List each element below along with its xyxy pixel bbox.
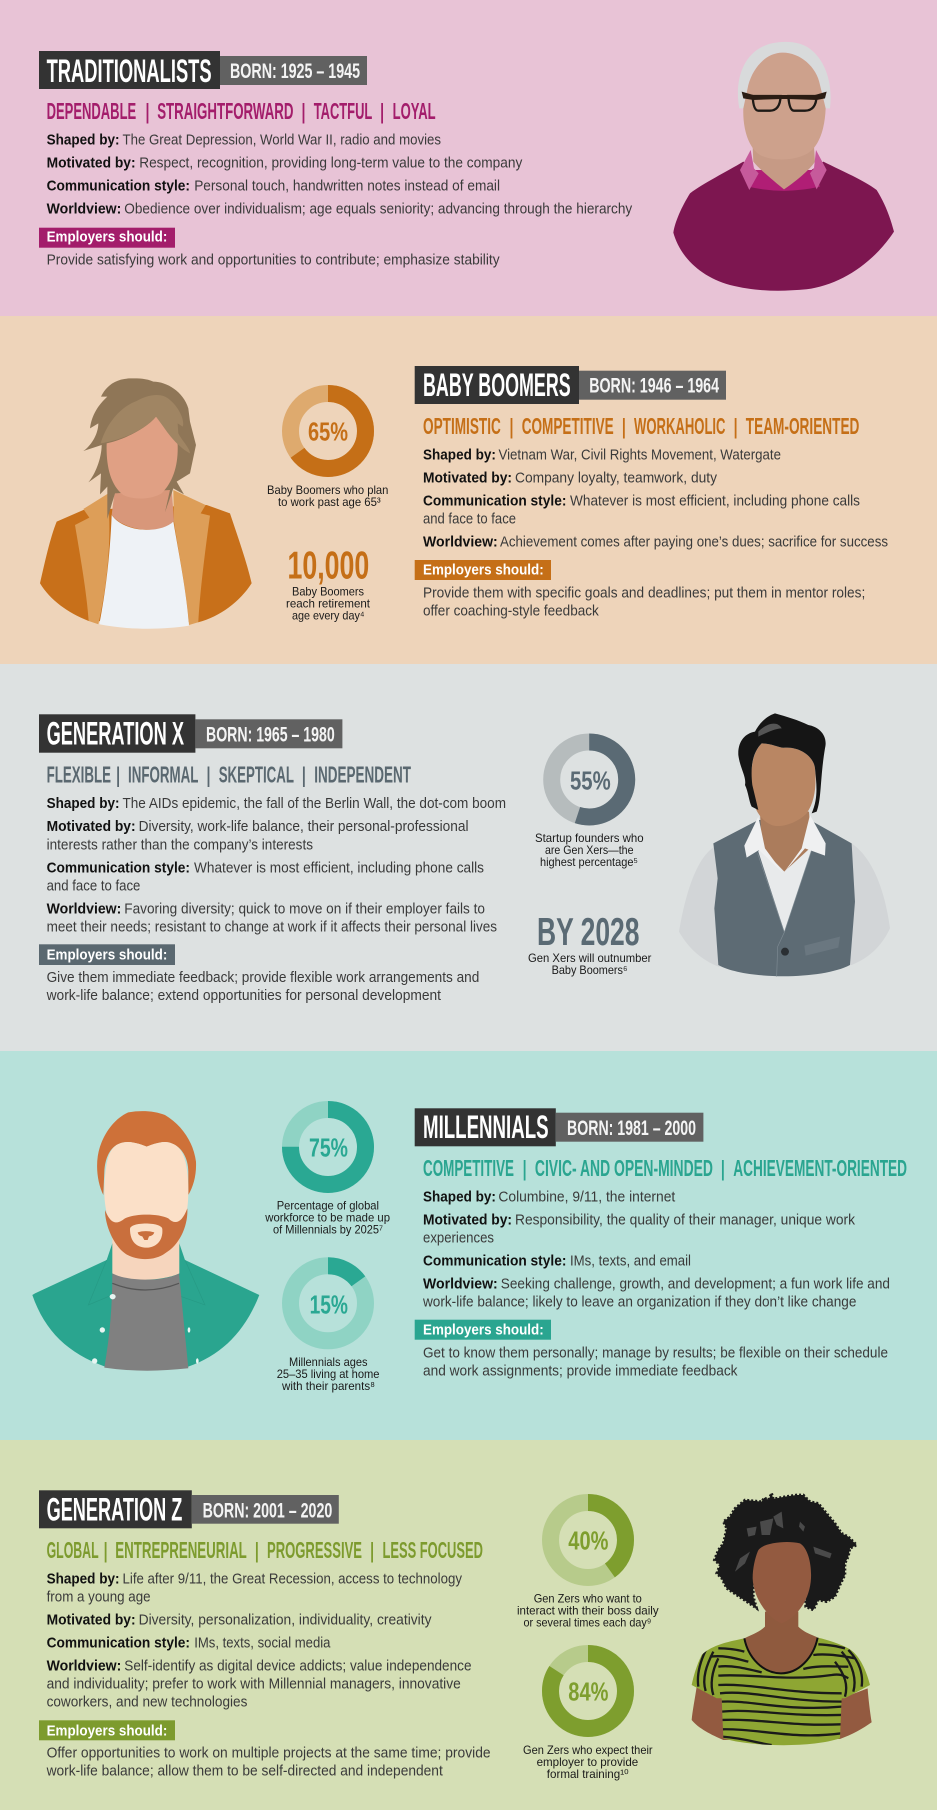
donut chart: 65% [290, 394, 366, 468]
callout: Employers should: Give them immediate feedback; provide flexible work arrangements and [47, 969, 479, 986]
text block: Baby Boomers details: Communication style: [423, 492, 566, 509]
traits: Traditionalists: STRAIGHTFORWARD [157, 98, 294, 124]
heading: Millennials: BORN: 1981 – 2000 [567, 1116, 696, 1140]
heading: Baby Boomers: BABY BOOMERS [423, 367, 571, 403]
text block: Baby Boomers details: Worldview: [423, 533, 498, 550]
donut chart: 75%: 75% [309, 1135, 348, 1163]
traits: Generation Z: | [103, 1538, 109, 1563]
text block: Baby Boomers details: and face to face [423, 510, 516, 527]
callout: Employers should: Provide them with specific goals and deadlines; put them in mentor roles; [423, 585, 865, 602]
callout: Employers should: Employers should: [423, 562, 544, 579]
callout: Employers should: Offer opportunities to work on multiple projects at the same time; provide [47, 1745, 491, 1762]
caption: 75% stat: Percentage of global [277, 1198, 379, 1212]
caption: 40% stat: or several times each day⁹ [524, 1616, 651, 1630]
text block: Generation Z details: Worldview: [47, 1658, 121, 1675]
text block: Generation X details: meet their needs; resistant to change at work if it affects their personal lives [47, 918, 497, 935]
caption: 75% stat: workforce to be made up [264, 1210, 390, 1224]
traits: Traditionalists [47, 98, 436, 124]
caption: 40% stat: Gen Zers who want to [534, 1592, 642, 1606]
text block: Generation X details: Communication style: [47, 859, 190, 876]
text block: Baby Boomers details: Shaped by: [423, 446, 496, 463]
traits: Traditionalists: | [301, 99, 306, 124]
illustration: woman with afro and striped shirt [692, 1493, 872, 1745]
stat: 10,000: Baby Boomers [292, 584, 364, 598]
traits: Baby Boomers: | [733, 414, 738, 439]
text block: Traditionalists details [47, 132, 633, 218]
callout: Employers should: work-life balance; allow them to be self-directed and independent [46, 1763, 444, 1780]
text block: Generation X details: Diversity, work-life balance, their personal-professional [139, 818, 468, 835]
caption: 40% stat: interact with their boss daily [517, 1604, 659, 1618]
traits: Traditionalists: LOYAL [393, 98, 436, 124]
traits: Generation Z: | [369, 1538, 375, 1563]
text block: Millennials details: Motivated by: [423, 1211, 512, 1228]
text block: Generation X details: Motivated by: [47, 818, 136, 835]
text block: Millennials details: Columbine, 9/11, the internet [498, 1188, 676, 1205]
heading: Millennials: MILLENNIALS [423, 1109, 549, 1145]
traits: Generation X: INDEPENDENT [314, 762, 411, 788]
panel: Generation Z [0, 1440, 937, 1810]
text block: Millennials details: Shaped by: [423, 1188, 496, 1205]
traits: Baby Boomers [423, 413, 859, 439]
traits: Millennials: | [522, 1156, 527, 1181]
text block: Baby Boomers details: Motivated by: [423, 469, 512, 486]
text block: Generation Z details: and individuality; prefer to work with Millennial managers, innovative [47, 1676, 461, 1693]
heading: Baby Boomers: BORN: 1946 – 1964 [589, 374, 719, 398]
traits: Baby Boomers: | [509, 414, 514, 439]
callout: Employers should: and work assignments; provide immediate feedback [423, 1362, 738, 1379]
caption: 84% stat [523, 1743, 653, 1781]
text block: Generation Z details: Self-identify as digital device addicts; value independence [124, 1658, 472, 1675]
traits: Baby Boomers: COMPETITIVE [522, 413, 614, 439]
text block: Millennials details: Worldview: [423, 1276, 498, 1293]
callout: Employers should: Provide satisfying work and opportunities to contribute; emphasize stability [47, 251, 500, 268]
callout: Employers should [415, 1320, 888, 1379]
traits: Millennials: | [720, 1156, 726, 1181]
heading: Generation Z: BORN: 2001 – 2020 [203, 1498, 332, 1522]
caption: 65% stat [267, 483, 388, 509]
stat: 10,000: 10,000 [288, 544, 369, 587]
traits: Generation X: | [206, 763, 211, 788]
traits: Millennials: COMPETITIVE [423, 1155, 514, 1181]
text block: Millennials details: Responsibility, the quality of their manager, unique work [515, 1211, 855, 1228]
caption: 15% stat: 25–35 living at home [277, 1367, 380, 1381]
stat: By 2028: Gen Xers will outnumber [528, 951, 651, 965]
stat: By 2028 [528, 911, 651, 977]
text block: Traditionalists details: Worldview: [47, 201, 121, 218]
illustration: man with dark hair and vest [679, 713, 890, 977]
panel: Generation X [0, 664, 937, 1051]
caption: 84% stat: formal training¹⁰ [547, 1767, 629, 1781]
donut chart: 84%: 84% [568, 1679, 608, 1707]
traits: Generation X: | [301, 763, 307, 788]
text block: Millennials details: Communication style: [423, 1253, 566, 1270]
traits: Baby Boomers: OPTIMISTIC [423, 413, 501, 439]
callout: Employers should: offer coaching-style feedback [423, 603, 599, 620]
text block: Millennials details: work-life balance; likely to leave an organization if they don’t like change [422, 1294, 856, 1311]
panel: Millennials [0, 1051, 937, 1440]
traits: Generation X [47, 762, 411, 788]
text block: Traditionalists details: Shaped by: [47, 132, 120, 148]
traits: Generation Z: GLOBAL [47, 1537, 99, 1563]
text block: Generation Z details: Shaped by: [47, 1570, 120, 1587]
caption: 84% stat: employer to provide [537, 1755, 639, 1769]
donut chart: 40% [550, 1502, 626, 1578]
traits: Millennials: CIVIC- AND OPEN-MINDED [535, 1155, 713, 1181]
donut chart: 40%: 40% [568, 1527, 608, 1555]
text block: Traditionalists details: Respect, recognition, providing long-term value to the company [139, 155, 523, 172]
caption: 65% stat: Baby Boomers who plan [267, 483, 388, 497]
text block: Generation Z details: from a young age [47, 1589, 151, 1606]
text block: Generation X details [47, 795, 506, 935]
traits: Baby Boomers: TEAM-ORIENTED [746, 413, 859, 439]
text block: Millennials details: IMs, texts, and email [570, 1253, 691, 1270]
text block: Generation Z details: Communication style: [47, 1635, 190, 1652]
donut chart: 75% [290, 1110, 366, 1184]
text block: Generation Z details: coworkers, and new technologies [47, 1694, 247, 1711]
heading: Traditionalists: TRADITIONALISTS [47, 53, 212, 89]
heading: Traditionalists: BORN: 1925 – 1945 [230, 59, 360, 83]
stat: By 2028: Baby Boomers⁶ [552, 963, 628, 977]
caption: 55% stat [535, 831, 644, 869]
text block: Millennials details: experiences [423, 1229, 494, 1246]
callout: Employers should: Employers should: [47, 229, 167, 246]
illustration: woman with long hair and orange jacket [40, 378, 252, 629]
text block: Generation X details: Whatever is most efficient, including phone calls [194, 859, 484, 876]
stat: 10,000 [286, 544, 371, 622]
callout: Employers should: Get to know them personally; manage by results; be flexible on their schedule [423, 1344, 888, 1361]
heading: Generation X: BORN: 1965 – 1980 [206, 722, 335, 746]
traits: Traditionalists: DEPENDABLE [47, 98, 136, 124]
donut chart: 55% [552, 742, 627, 817]
caption: 40% stat [517, 1592, 659, 1630]
traits: Generation Z: ENTREPRENEURIAL [115, 1537, 247, 1563]
traits: Generation X: FLEXIBLE [47, 762, 111, 788]
caption: 65% stat: to work past age 65³ [278, 495, 381, 509]
caption: 84% stat: Gen Zers who expect their [523, 1743, 653, 1757]
callout: Employers should: Employers should: [423, 1322, 544, 1339]
stat: 10,000: reach retirement [286, 596, 371, 610]
traits: Generation X: INFORMAL [128, 762, 198, 788]
traits: Traditionalists: | [145, 99, 150, 124]
stat: By 2028: BY 2028 [537, 911, 640, 954]
traits: Generation Z: LESS FOCUSED [382, 1537, 483, 1563]
text block: Traditionalists details: Personal touch, handwritten notes instead of email [194, 178, 500, 195]
heading: Generation Z: GENERATION Z [47, 1491, 182, 1527]
text block: Generation X details: Worldview: [47, 900, 121, 917]
text block: Generation X details: Favoring diversity; quick to move on if their employer fails to [124, 900, 485, 917]
donut chart: 65%: 65% [308, 419, 348, 447]
text block: Generation Z details: IMs, texts, social media [194, 1635, 331, 1652]
panel: Baby Boomers [0, 316, 937, 664]
text block: Generation Z details: Life after 9/11, the Great Recession, access to technology [122, 1570, 462, 1587]
text block: Millennials details [422, 1188, 890, 1311]
caption: 75% stat [264, 1198, 390, 1236]
traits: Generation X: SKEPTICAL [219, 762, 294, 788]
heading: Generation X: GENERATION X [47, 716, 184, 752]
caption: 15% stat: Millennials ages [289, 1355, 368, 1369]
text block: Traditionalists details: Motivated by: [47, 155, 136, 172]
caption: 15% stat [277, 1355, 380, 1393]
text block: Baby Boomers details: Company loyalty, teamwork, duty [515, 469, 717, 486]
text block: Traditionalists details: Obedience over individualism; age equals seniority; advancing through the hierarchy [124, 201, 633, 218]
donut chart: 55%: 55% [570, 767, 611, 795]
traits: Baby Boomers: | [621, 414, 627, 439]
callout: Employers should [415, 560, 865, 620]
traits: Baby Boomers: WORKAHOLIC [634, 413, 726, 439]
illustration: bearded man with green shirt [32, 1111, 259, 1371]
text block: Baby Boomers details: Achievement comes after paying one’s dues; sacrifice for success [500, 533, 888, 550]
caption: 55% stat: highest percentage⁵ [540, 855, 638, 869]
caption: 75% stat: of Millennials by 2025⁷ [273, 1222, 383, 1236]
traits: Traditionalists: | [379, 99, 385, 124]
donut chart: 15% [290, 1266, 366, 1341]
callout: Employers should [39, 1720, 491, 1780]
caption: 55% stat: Startup founders who [535, 831, 644, 845]
text block: Generation X details: interests rather than the company’s interests [47, 836, 313, 853]
text block: Generation X details: The AIDs epidemic, the fall of the Berlin Wall, the dot-com boom [122, 795, 506, 812]
text block: Generation X details: Shaped by: [47, 795, 120, 812]
text block: Generation X details: and face to face [47, 877, 140, 894]
caption: 15% stat: with their parents⁸ [281, 1379, 375, 1393]
text block: Baby Boomers details: Vietnam War, Civil Rights Movement, Watergate [498, 446, 781, 463]
callout: Employers should [39, 228, 500, 268]
text block: Generation Z details: Diversity, personalization, individuality, creativity [139, 1612, 432, 1629]
traits: Generation X: | [115, 763, 121, 788]
callout: Employers should [39, 944, 479, 1004]
traits: Generation Z: | [254, 1538, 260, 1563]
text block: Traditionalists details: The Great Depression, World War II, radio and movies [122, 132, 441, 148]
callout: Employers should: Employers should: [47, 946, 167, 963]
text block: Baby Boomers details [423, 446, 888, 550]
donut chart: 15%: 15% [310, 1291, 348, 1319]
text block: Generation Z details [47, 1570, 471, 1711]
text block: Generation Z details: Motivated by: [47, 1612, 136, 1629]
caption: 55% stat: are Gen Xers—the [545, 843, 634, 857]
illustration: older man with glasses [673, 42, 894, 291]
traits: Generation Z: PROGRESSIVE [267, 1537, 362, 1563]
callout: Employers should: work-life balance; extend opportunities for personal development [46, 987, 442, 1004]
stat: 10,000: age every day⁴ [292, 608, 364, 622]
panel: Traditionalists [0, 0, 937, 316]
callout: Employers should: Employers should: [47, 1722, 167, 1739]
text block: Baby Boomers details: Whatever is most efficient, including phone calls [570, 492, 860, 509]
traits: Millennials [423, 1155, 907, 1181]
traits: Traditionalists: TACTFUL [314, 98, 372, 124]
donut chart: 84% [550, 1654, 626, 1728]
traits: Generation Z [47, 1537, 483, 1563]
text block: Millennials details: Seeking challenge, growth, and development; a fun work life and [501, 1276, 890, 1293]
text block: Traditionalists details: Communication style: [47, 178, 190, 195]
